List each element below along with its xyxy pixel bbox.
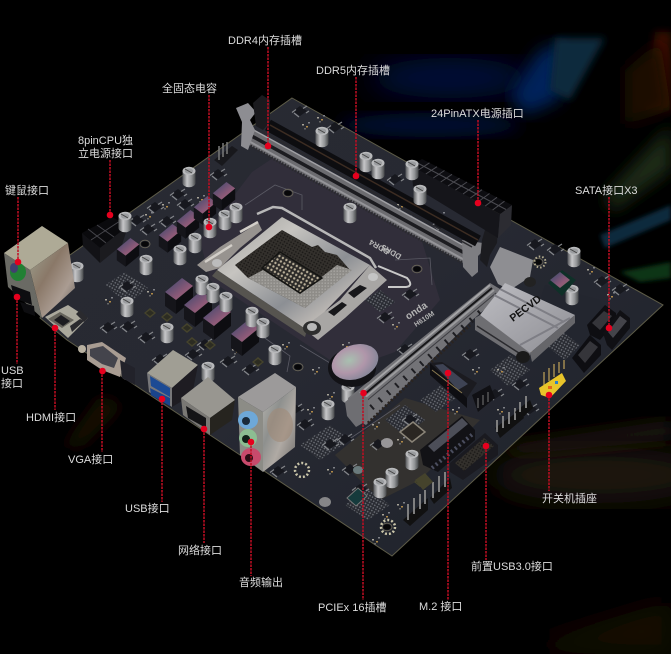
PECVD heatsink: [475, 283, 575, 362]
board print: DDR labels: [367, 237, 403, 261]
USB 3.0 port stack: [147, 350, 198, 407]
tiny components: [105, 115, 615, 544]
PS/2 jack: [10, 263, 26, 281]
callout: front USB 3.0: [471, 443, 553, 573]
board substrate: [40, 98, 663, 556]
mounting holes: [140, 189, 543, 531]
audio chip and rear components: [295, 422, 433, 534]
PCIe x16 slot: [345, 247, 546, 427]
CMOS battery: [327, 338, 383, 387]
board traces: [245, 185, 432, 452]
pink jack: [241, 448, 261, 466]
stacked USB openings: [11, 285, 32, 305]
callout: PCIe x16 slot: [318, 390, 386, 614]
callout: DDR5 slot: [316, 63, 390, 179]
socket lever wire: [378, 266, 410, 287]
callout: 8-pin CPU power: [78, 134, 133, 218]
DDR5 latch bottom: [480, 223, 498, 267]
callout: rear USB: [1, 294, 24, 390]
callout: audio output: 音频输出: [239, 575, 283, 589]
board print: brand: [404, 300, 436, 329]
callout: network port: 网络接口: [178, 543, 222, 557]
callout: front USB 3.0: 前置USB3.0接口: [471, 559, 553, 573]
DDR4 latch bottom: [462, 240, 483, 277]
M.2 slot: [430, 362, 495, 412]
solder pad arrays: [105, 272, 580, 520]
board print: brand: onda: [404, 300, 430, 323]
callout: 24-pin ATX power: 24PinATX电源插口: [431, 106, 524, 120]
callout: M.2: [419, 370, 462, 613]
callout: HDMI: HDMI接口: [26, 411, 76, 424]
socket left clamp: [197, 222, 262, 272]
socket plate: [248, 265, 352, 308]
fan header pins: [214, 142, 238, 166]
callout: SATA ports: [575, 184, 638, 331]
small surface-mount chips: [100, 106, 629, 495]
SATA ports: [572, 305, 630, 373]
24-pin ATX power connector: [411, 159, 512, 238]
audio jack stack: [238, 373, 296, 472]
callout: audio output: [239, 439, 283, 589]
PCIe latch: [490, 247, 533, 290]
chipset screws and cap pad: [516, 270, 576, 363]
CPU pins: [262, 252, 322, 293]
callout: rear USB: 接口: [1, 377, 23, 390]
blue jack: [238, 411, 258, 429]
callout: rear USB: USB: [1, 365, 24, 377]
socket right hardware: [303, 265, 387, 340]
callout: SATA ports: SATA接口X3: [575, 184, 638, 197]
pin headers: [403, 396, 533, 526]
CPU socket: [197, 207, 410, 340]
motherboard: [4, 95, 663, 556]
callout: 8-pin CPU power: 立电源接口: [78, 146, 133, 160]
LAN port: [181, 377, 235, 435]
callout: DDR5 slot: DDR5内存插槽: [316, 63, 390, 77]
VGA port: [78, 342, 135, 385]
PCIe end block: [345, 392, 368, 427]
callout: network port: [178, 426, 222, 557]
callout: PCIe x16 slot: PCIEx 16插槽: [318, 600, 386, 614]
callout: DDR4 slot: DDR4内存插槽: [228, 33, 302, 47]
callout: USB: USB接口: [125, 502, 170, 515]
DDR5 memory slot: [253, 95, 498, 267]
DDR4 latch top: [236, 103, 256, 150]
callout: VGA: [68, 368, 113, 466]
socket cavity: [235, 230, 350, 308]
callout: keyboard mouse port: 键鼠接口: [5, 183, 49, 197]
socket metal frame: [217, 217, 370, 330]
HDMI port: [45, 305, 88, 338]
callout: VGA: VGA接口: [68, 453, 113, 466]
callout: USB: [125, 396, 170, 515]
capacitors: [70, 127, 580, 498]
8-pin CPU power connector: [82, 217, 128, 263]
PCIe x1 slot: [420, 416, 475, 472]
callout: power switch header: [542, 392, 597, 505]
board print: DDR labels: DDR5: [379, 242, 403, 261]
callout: power switch header: 开关机插座: [542, 491, 597, 505]
right area tint: [520, 285, 620, 380]
VRM chokes: [117, 182, 259, 356]
yellow front panel header: [539, 360, 566, 398]
callout: M.2: M.2 接口: [419, 600, 462, 613]
DDR4 memory slot: [236, 103, 483, 277]
green jack: [239, 429, 257, 447]
callout: HDMI: [26, 325, 76, 424]
PS/2 and USB combo port: [4, 226, 75, 318]
board print: brand: H610M: [413, 310, 436, 329]
callout: keyboard mouse port: [5, 183, 49, 265]
DDR5 latch top: [253, 95, 270, 130]
board print: DDR labels: DDR4: [367, 237, 391, 256]
socket top rail: [257, 207, 376, 268]
socket screw: [303, 321, 321, 335]
front USB 3.0 header: [450, 433, 498, 480]
callout: solid capacitors: 全固态电容: [162, 81, 217, 95]
PECVD heatsink: PECVD: [508, 293, 544, 324]
callout: 8-pin CPU power: 8pinCPU独: [78, 134, 133, 147]
lower area tint: [335, 398, 480, 500]
socket area tint: [200, 152, 440, 370]
callout: DDR4 slot: [228, 33, 302, 149]
callout: 24-pin ATX power: [431, 106, 524, 206]
square inductors: [144, 308, 426, 487]
callout: solid capacitors: [162, 81, 217, 230]
